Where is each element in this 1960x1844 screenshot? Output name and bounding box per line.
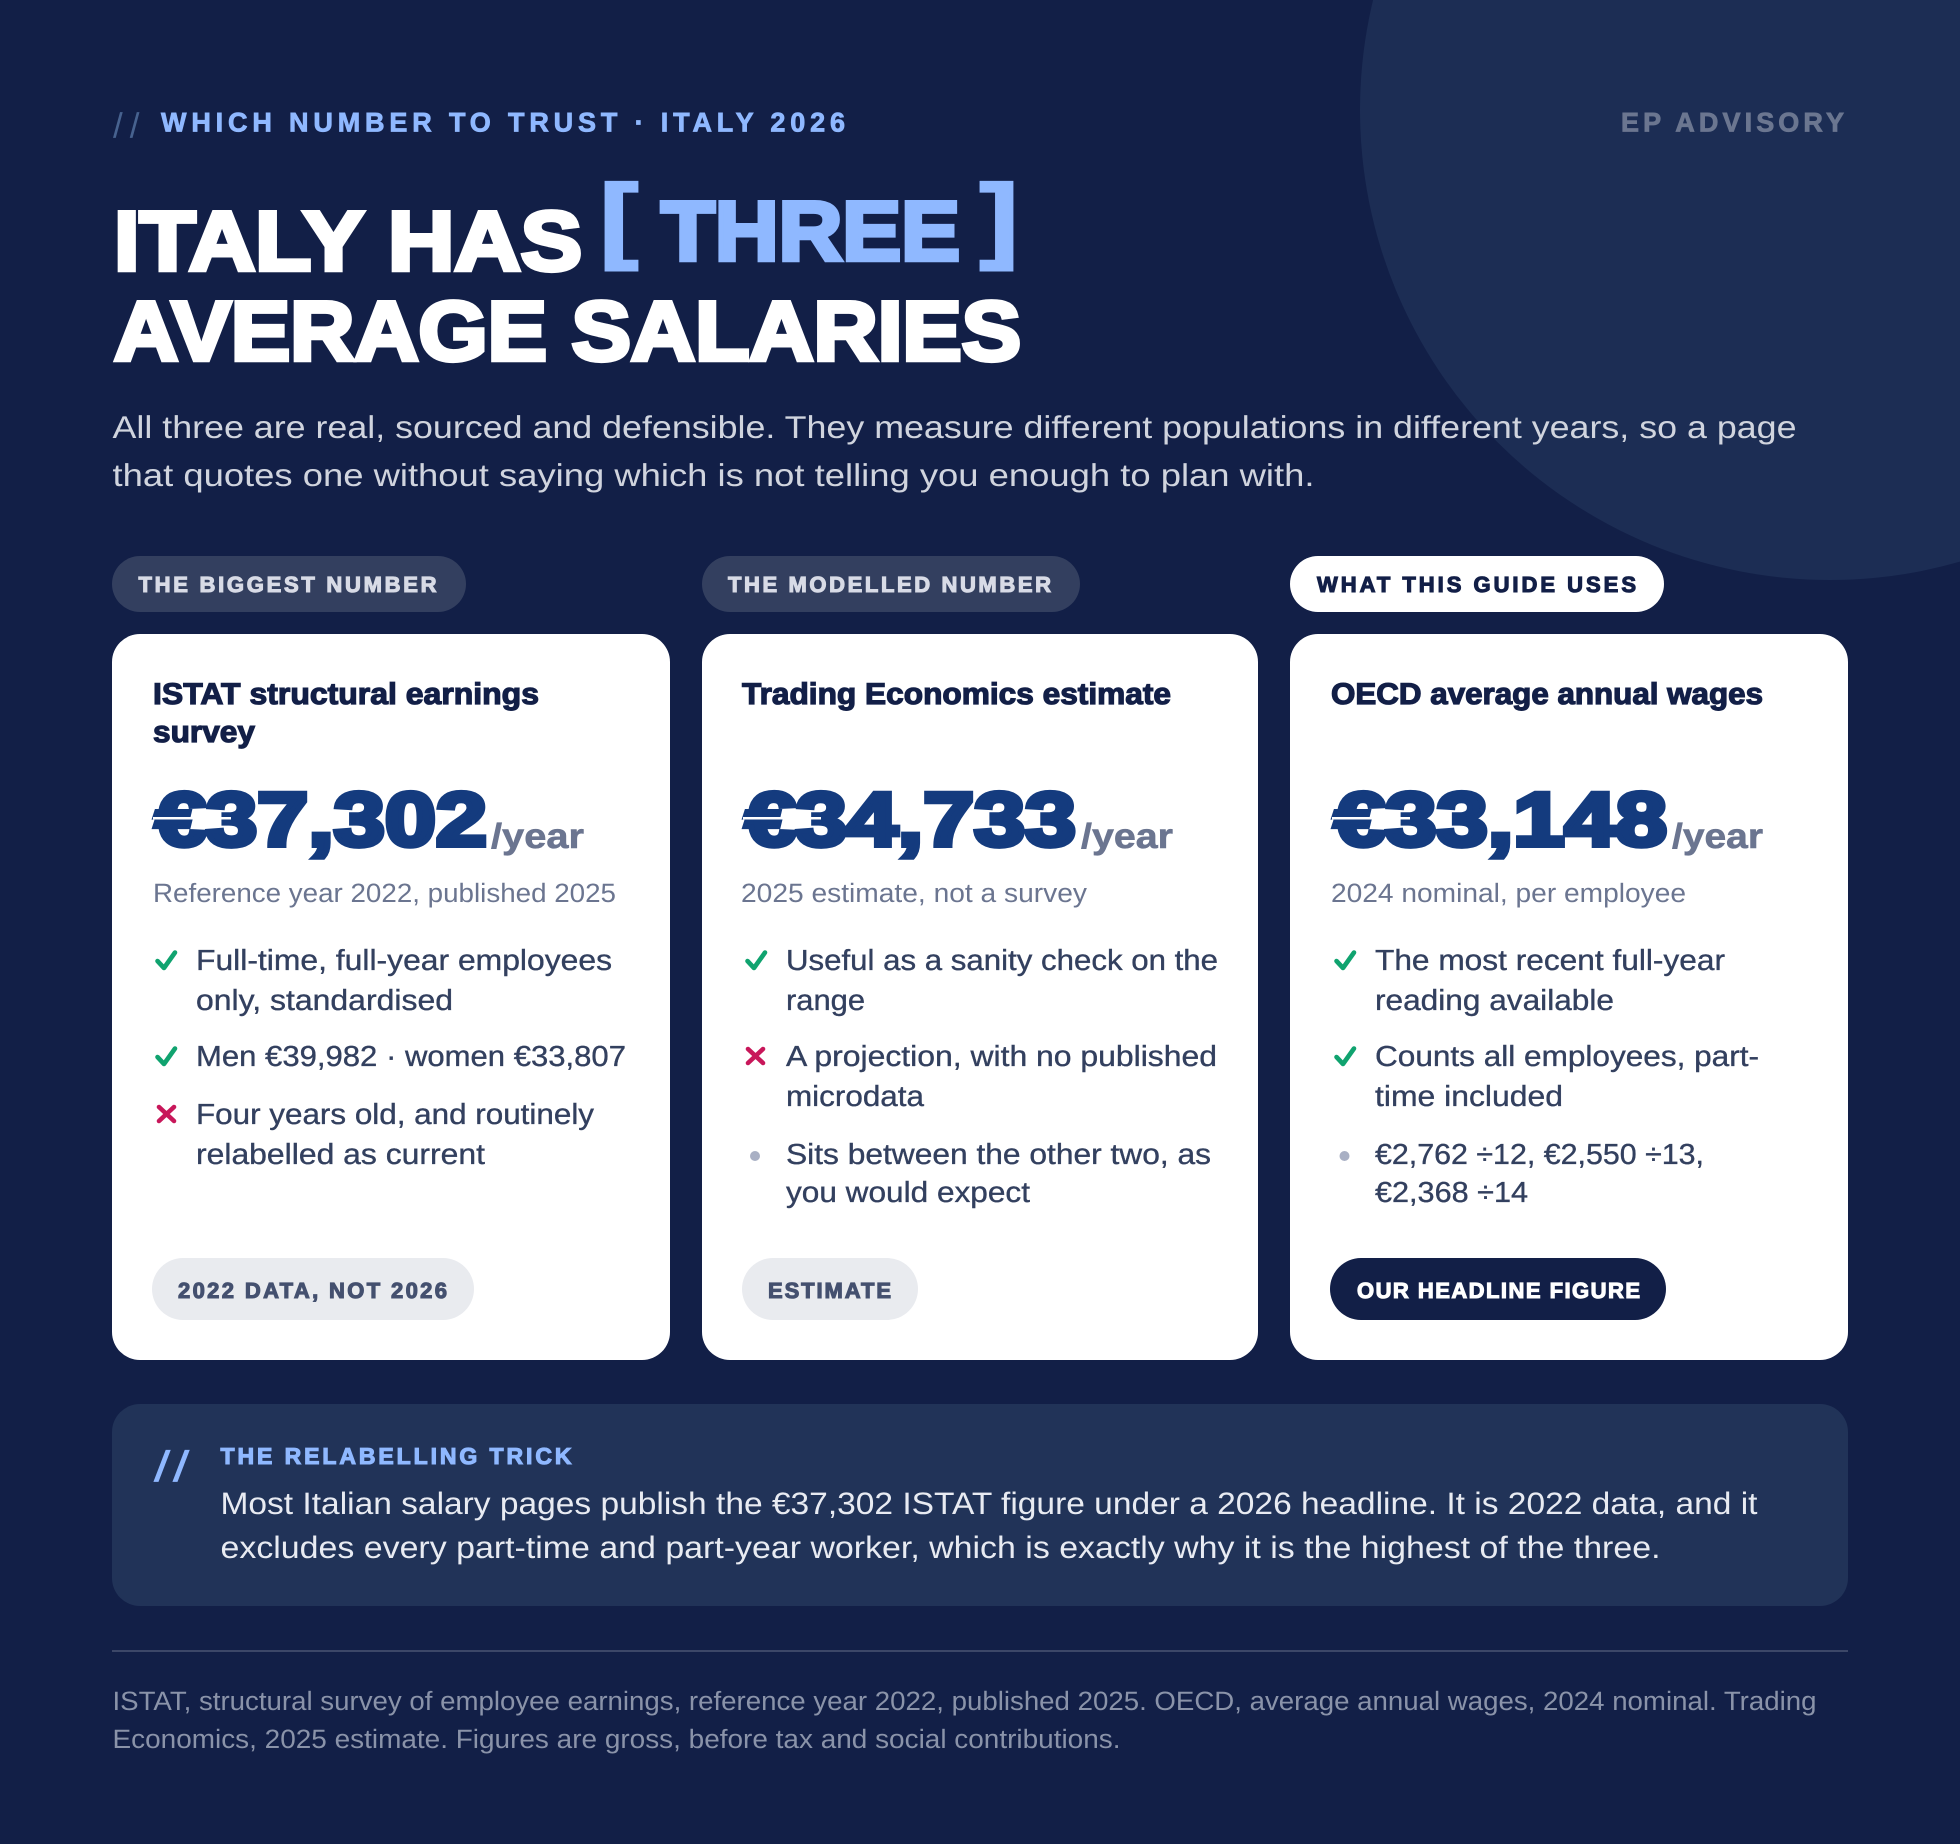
salary figure: /year	[1672, 817, 1763, 856]
title: ]	[980, 166, 1018, 270]
salary figure: €34,733	[745, 778, 1076, 862]
card title: survey	[153, 716, 255, 749]
neutral item: Sits between the other two, as	[786, 1139, 1211, 1171]
check item: time included	[1375, 1081, 1563, 1113]
reference note: 2025 estimate, not a survey	[741, 878, 1088, 908]
cross item: A projection, with no published	[786, 1041, 1217, 1073]
intro paragraph	[112, 409, 1796, 493]
reference note: Reference year 2022, published 2025	[153, 878, 616, 908]
intro paragraph: All three are real, sourced and defensible. They measure different populations in different years, so a page	[112, 409, 1796, 445]
check item: The most recent full-year	[1375, 945, 1725, 977]
title	[114, 166, 1021, 378]
check item	[158, 945, 612, 1017]
neutral item	[1340, 1139, 1704, 1209]
panel: Trading Economics card	[702, 634, 1258, 1360]
tag	[742, 1258, 918, 1320]
footer sources	[112, 1686, 1816, 1754]
salary figure	[153, 778, 584, 862]
check item: Counts all employees, part-	[1375, 1041, 1759, 1073]
salary figure	[1332, 778, 1763, 862]
tag: ESTIMATE	[768, 1278, 891, 1303]
neutral item: €2,368 ÷14	[1375, 1177, 1528, 1209]
card title: ISTAT structural earnings	[153, 678, 539, 711]
cross item	[159, 1099, 595, 1171]
pill: the biggest number: THE BIGGEST NUMBER	[138, 572, 437, 597]
callout heading: THE RELABELLING TRICK	[220, 1443, 572, 1469]
neutral item	[750, 1139, 1211, 1209]
card title	[153, 678, 539, 749]
eyebrow: WHICH NUMBER TO TRUST · ITALY 2026	[161, 108, 845, 138]
panel: OECD card	[1290, 634, 1848, 1360]
footer sources: Economics, 2025 estimate. Figures are gross, before tax and social contributions.	[112, 1724, 1120, 1754]
pill: what this guide uses: WHAT THIS GUIDE USES	[1317, 572, 1636, 597]
check item: only, standardised	[196, 985, 453, 1017]
tag: headline figure: OUR HEADLINE FIGURE	[1357, 1278, 1640, 1303]
neutral item: €2,762 ÷12, €2,550 ÷13,	[1375, 1139, 1704, 1171]
pill: the modelled number: THE MODELLED NUMBER	[728, 572, 1051, 597]
neutral item: you would expect	[786, 1177, 1030, 1209]
footer sources: ISTAT, structural survey of employee earnings, reference year 2022, published 2025. OECD, average annual wages, 2024 nominal. Trading	[112, 1686, 1816, 1716]
check item	[748, 945, 1218, 1017]
title: ITALY HAS	[114, 194, 582, 288]
cross item	[748, 1041, 1217, 1113]
eyebrow: //	[113, 106, 146, 146]
salary figure: /year	[1081, 817, 1173, 856]
cross item: Four years old, and routinely	[196, 1099, 595, 1131]
title: AVERAGE SALARIES	[114, 284, 1021, 378]
callout text	[220, 1486, 1758, 1565]
pill: the biggest number	[112, 556, 466, 612]
check item: Useful as a sanity check on the	[786, 945, 1218, 977]
title: THREE	[661, 184, 960, 278]
pill: what this guide uses	[1290, 556, 1664, 612]
brand label: EP ADVISORY	[1621, 108, 1844, 138]
check item: reading available	[1375, 985, 1614, 1017]
tag	[152, 1258, 474, 1320]
intro paragraph: that quotes one without saying which is not telling you enough to plan with.	[112, 457, 1314, 493]
check item: range	[786, 985, 865, 1017]
salary figure: /year	[491, 817, 584, 856]
icon: slashes: //	[153, 1443, 193, 1491]
card title: Trading Economics estimate	[742, 678, 1171, 711]
callout: the relabelling trick	[112, 1404, 1848, 1606]
check item	[1336, 1041, 1759, 1113]
pill: the modelled number	[702, 556, 1080, 612]
card title: OECD average annual wages	[1331, 678, 1763, 711]
decorative background circle	[1360, 0, 1960, 580]
panel: ISTAT card	[112, 634, 670, 1360]
callout text: Most Italian salary pages publish the €37,302 ISTAT figure under a 2026 headline. It is 2022 data, and it	[220, 1486, 1758, 1521]
title: [	[600, 166, 638, 270]
salary figure: €33,148	[1334, 778, 1667, 862]
check item: Men €39,982 · women €33,807	[196, 1041, 626, 1073]
salary figure: €37,302	[155, 778, 487, 862]
cross item: relabelled as current	[196, 1139, 485, 1171]
tag: headline figure	[1330, 1258, 1666, 1320]
reference note: 2024 nominal, per employee	[1331, 878, 1686, 908]
salary figure	[743, 778, 1173, 862]
check item: Full-time, full-year employees	[196, 945, 612, 977]
check item	[1336, 945, 1725, 1017]
callout text: excludes every part-time and part-year worker, which is exactly why it is the highest of the three.	[220, 1530, 1660, 1565]
cross item: microdata	[786, 1081, 925, 1113]
tag: 2022 DATA, NOT 2026	[178, 1278, 447, 1303]
